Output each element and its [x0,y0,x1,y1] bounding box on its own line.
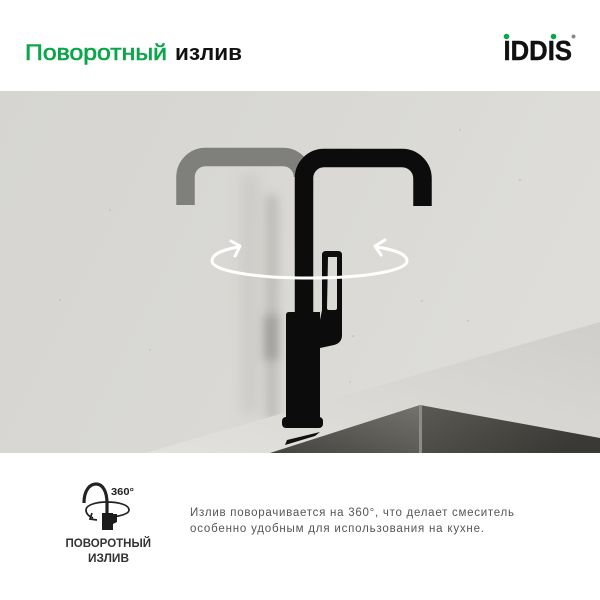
description text [190,507,514,535]
feature icon: faucet 360 [84,484,134,530]
description text: Излив поворачивается на 360°, что делает смеситель [190,507,514,519]
sink left wall [270,405,420,453]
title: излив [175,40,242,65]
body [102,513,117,530]
lever loop [320,251,342,348]
body [286,312,320,420]
arrow head [90,513,97,520]
base [282,417,323,428]
black faucet [282,158,422,445]
spout arc [84,484,107,515]
sink corner highlight [419,405,422,453]
grey ghost spout [186,157,303,205]
feature label [66,535,151,565]
logo: IDDIS: IDDIS [504,35,572,66]
description text: особенно удобным для использования на кухне. [190,523,484,535]
faucet shadow on wall [242,175,278,420]
feature label: ИЗЛИВ [88,551,129,565]
wall background [0,91,600,453]
360 label: 360° [111,487,134,498]
title [25,40,242,65]
rotation ring [86,502,129,518]
title: Поворотный [25,40,167,65]
rotation arrow [212,240,407,278]
countertop [145,322,600,453]
wall specks [59,129,521,383]
sink right wall [420,405,600,453]
spout [304,158,422,330]
feature label: ПОВОРОТНЫЙ [66,535,151,550]
reflection [285,432,320,445]
photo: kitchen faucet on counter [0,91,600,453]
